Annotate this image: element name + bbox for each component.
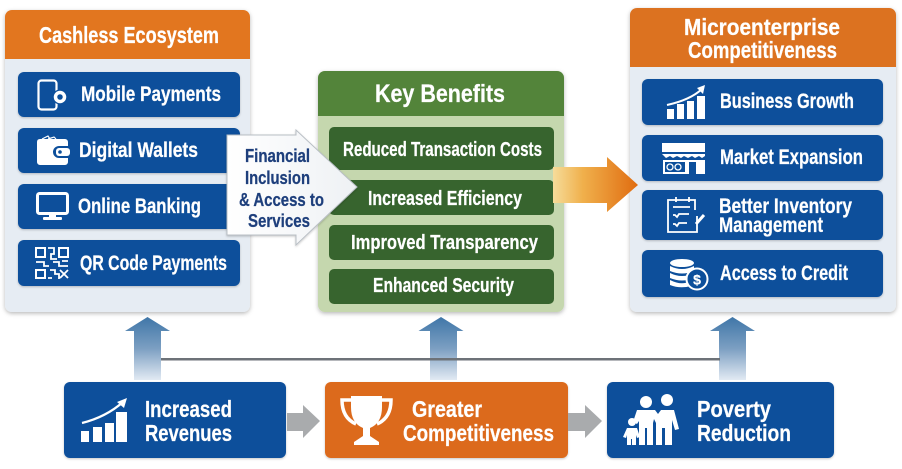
icon: coins bbox=[670, 259, 708, 290]
microenterprise heading: Microenterprise bbox=[684, 14, 840, 40]
item: business growth: Business Growth bbox=[720, 90, 854, 113]
item: access to credit bbox=[642, 250, 883, 297]
item: enhanced security: Enhanced Security bbox=[373, 275, 515, 297]
item: increased efficiency: Increased Efficiency bbox=[368, 188, 523, 210]
item: reduced transaction costs: Reduced Transaction Costs bbox=[343, 139, 542, 161]
item: online banking: Online Banking bbox=[78, 195, 201, 218]
box: increased revenues: Increased bbox=[145, 396, 232, 422]
key benefits heading bbox=[318, 71, 564, 116]
box: greater competitiveness: Greater bbox=[412, 396, 482, 422]
item: online banking bbox=[18, 184, 240, 229]
arrow: benefits to competitiveness bbox=[553, 157, 638, 212]
arrow: competitiveness to poverty reduction bbox=[568, 405, 602, 438]
item: mobile payments bbox=[18, 72, 240, 117]
icon: trophy bbox=[342, 396, 391, 445]
item: digital wallets: Digital Wallets bbox=[79, 139, 198, 162]
up arrow: right bbox=[710, 317, 755, 380]
box: greater competitiveness: Competitiveness bbox=[403, 420, 554, 446]
key benefits heading: Key Benefits bbox=[375, 80, 505, 108]
icon: checklist bbox=[668, 197, 704, 232]
item: business growth bbox=[642, 79, 883, 125]
icon: family bbox=[623, 394, 679, 445]
icon: phone with gear bbox=[38, 80, 68, 110]
box: poverty reduction: Reduction bbox=[697, 420, 791, 446]
panel: key benefits bbox=[318, 71, 564, 312]
item: digital wallets bbox=[18, 128, 240, 173]
box: poverty reduction: Poverty bbox=[697, 396, 771, 422]
arrow: financial inclusion callout: & Access to bbox=[239, 190, 324, 210]
microenterprise heading: Competitiveness bbox=[688, 37, 837, 63]
item: qr code payments: QR Code Payments bbox=[80, 252, 227, 275]
icon: growth chart bbox=[667, 85, 705, 119]
item: better inventory management bbox=[642, 190, 883, 240]
icon: wallet bbox=[37, 136, 70, 165]
box: poverty reduction bbox=[607, 382, 834, 458]
item: mobile payments: Mobile Payments bbox=[81, 83, 221, 106]
box: increased revenues bbox=[64, 382, 286, 458]
arrow: financial inclusion callout: Financial bbox=[245, 146, 310, 166]
item: better inventory management: Better Inventory bbox=[719, 195, 852, 218]
box: greater competitiveness bbox=[325, 382, 568, 458]
up arrow: left bbox=[125, 317, 170, 380]
item: increased efficiency bbox=[329, 180, 554, 215]
up arrow: centre bbox=[418, 317, 464, 380]
item: enhanced security bbox=[329, 269, 554, 304]
item: market expansion bbox=[642, 135, 883, 181]
cashless heading bbox=[5, 10, 250, 59]
item: improved transparency: Improved Transparency bbox=[351, 232, 539, 254]
panel: cashless ecosystem bbox=[5, 10, 250, 312]
connector line bbox=[161, 358, 720, 360]
arrow: financial inclusion callout bbox=[227, 130, 357, 245]
arrow: revenues to competitiveness bbox=[287, 405, 320, 438]
item: improved transparency bbox=[329, 225, 554, 260]
arrow: financial inclusion callout: Inclusion bbox=[245, 168, 310, 188]
icon: storefront bbox=[662, 143, 705, 174]
microenterprise heading bbox=[630, 8, 896, 67]
item: qr code payments bbox=[18, 240, 240, 286]
item: reduced transaction costs bbox=[329, 127, 554, 170]
icon: monitor bbox=[38, 194, 68, 220]
item: access to credit: Access to Credit bbox=[720, 262, 848, 285]
box: increased revenues: Revenues bbox=[145, 420, 232, 446]
item: better inventory management: Management bbox=[719, 214, 823, 237]
icon: qr code bbox=[36, 248, 68, 279]
arrow: financial inclusion callout: Services bbox=[248, 211, 310, 231]
panel: microenterprise competitiveness bbox=[630, 8, 896, 312]
item: market expansion: Market Expansion bbox=[720, 146, 863, 169]
cashless heading: Cashless Ecosystem bbox=[39, 22, 219, 48]
icon: coins: $ bbox=[693, 272, 701, 288]
icon: revenue chart bbox=[81, 398, 127, 442]
